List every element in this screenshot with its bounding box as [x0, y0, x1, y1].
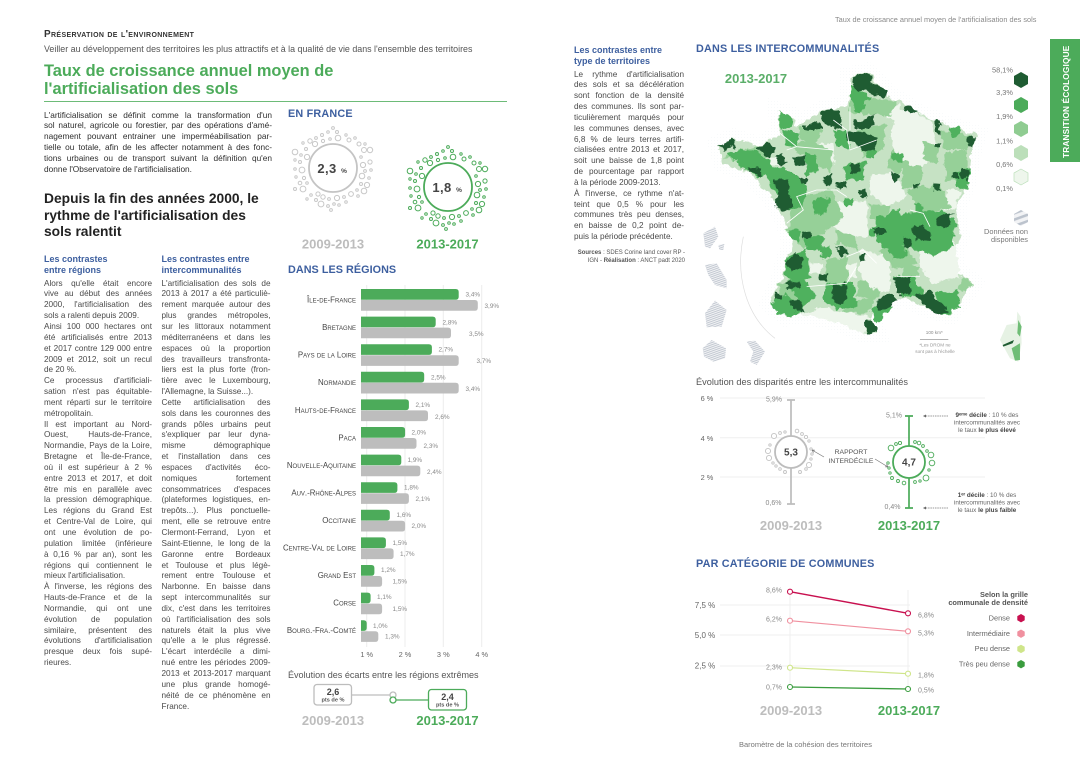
heading: type de territoires: Les contrastes entre [574, 45, 662, 55]
title: l'artificialisation des sols [44, 80, 238, 98]
text column: intercommunalités: Clermont-Ferrand, Lyon et [162, 528, 270, 537]
text column: type de territoires: communes très peu denses, [574, 210, 684, 219]
disparities subtitle: Évolution des disparités entre les intercommunalités [696, 376, 908, 386]
bar chart: regions: 3,5% [469, 331, 484, 338]
bar chart: regions: 1,6% [396, 512, 411, 519]
text column: intercommunalités: 2013 à 2017 a été particuliè- [162, 289, 270, 298]
text column: type de territoires: des sols et sa décélération [574, 80, 684, 89]
text column: régions: et 2017 contre 129 000 entre [44, 344, 152, 353]
heading: dans les intercommunalités: DANS LES INTERCOMMUNALITÉS [696, 42, 879, 54]
text column: régions: ont une évolution de po- [44, 528, 152, 537]
text column: régions: pulation limitée (inférieure [44, 539, 152, 548]
title: Taux de croissance annuel moyen de [44, 62, 333, 80]
regional gap chart: pts de % [436, 702, 459, 708]
text column: type de territoires: des communes. Ils sont par- [574, 102, 684, 111]
bar chart: regions: 2,1% [416, 402, 430, 409]
text column: régions: été artificialisés entre 2013 [44, 333, 152, 342]
line chart: commune categories [695, 588, 934, 694]
map legend: 0,1% [996, 184, 1013, 193]
text column: régions: Ce processus d'artificiali- [44, 376, 152, 385]
bar chart: regions: 1,1% [377, 594, 392, 601]
text column: intercommunalités: et l'installation dans ces [162, 452, 270, 461]
text column: type de territoires: sont fonction de la densité [574, 91, 684, 100]
bar chart: regions: Grand Est [318, 571, 356, 580]
bar chart: regions: 3,7% [476, 358, 491, 365]
disparities chart: intercommunalités avec [954, 420, 1020, 426]
text column: régions: vive au début des années [44, 289, 152, 298]
bar chart: regions: 2,0% [412, 523, 426, 530]
text column: intercommunalités: où l'artificialisation des sols [162, 615, 270, 624]
line chart: commune categories: 0,5% [918, 688, 934, 694]
text column: intercommunalités: Narbonne. En baisse dans [162, 582, 270, 591]
bar chart: regions: 1,0% [373, 623, 388, 630]
bar chart: regions: 1,3% [385, 634, 400, 640]
text column: type de territoires: À l'inverse, ce rythme n'at- [574, 189, 684, 198]
line chart: commune categories: 5,0 % [695, 631, 715, 640]
bar chart: regions: 1,5% [392, 606, 407, 613]
bar chart: regions: 1,5% [392, 578, 407, 586]
bar chart: regions: Normandie [318, 378, 356, 387]
France: 2013-2017 rate [407, 146, 488, 230]
text column: intercommunalités [162, 279, 270, 710]
text column: intercommunalités: ment, elle se retrouve entre [162, 517, 270, 526]
section label: Préservation de l'environnement [44, 29, 194, 40]
map period label: 2013-2017 [725, 71, 787, 86]
disparities chart: 0,4% [884, 504, 900, 511]
bar chart: regions: 4 % [475, 650, 488, 659]
bar chart: regions: 1,8% [404, 484, 419, 492]
intro text: tions urbaines ou de transport suivant la définition qu'en [44, 153, 272, 163]
bar chart: regions: 3,4% [466, 292, 480, 298]
map legend [984, 66, 1028, 244]
sources: IGN - Réalisation : ANCT padt 2020 [588, 258, 685, 264]
intro text: tielle ou totale, afin de les affecter notamment à des fonc- [44, 142, 272, 152]
text column: intercommunalités: (plateformes logistiques, en- [162, 495, 270, 504]
heading: type de territoires: type de territoires [574, 56, 650, 66]
text column: type de territoires [574, 70, 684, 241]
side tab label: TRANSITION ÉCOLOGIQUE [1061, 45, 1071, 158]
text column: type de territoires: puis la période précédente. [574, 232, 673, 241]
bar chart: regions: Paca [338, 434, 356, 442]
footer: Baromètre de la cohésion des territoires [739, 740, 872, 749]
map: France intercommunalities [703, 73, 1022, 365]
heading: par catégorie de communes: PAR CATÉGORIE DE COMMUNES [696, 558, 875, 570]
disparities chart: 5,3 [784, 448, 798, 458]
heading: en France: EN FRANCE [288, 108, 353, 120]
text column: régions: Ouest, Hauts-de-France, [44, 430, 152, 439]
sources: Sources : SDES Corine land cover RP - [578, 250, 685, 256]
disparities chart: 4,7 [902, 458, 916, 468]
bar chart: regions: Bourg.-Fra.-Comté [287, 626, 356, 635]
disparities chart: 5,9% [766, 396, 782, 404]
text column: régions: être mis en parallèle avec [44, 485, 152, 494]
text column: intercommunalités: France. [162, 702, 189, 710]
text column: régions: 2000, l'artificialisation des [44, 300, 152, 309]
disparities chart: 0,6% [766, 500, 781, 507]
text column: régions: À l'inverse, les régions des [44, 582, 152, 591]
subheading [44, 191, 259, 239]
text column: intercommunalités: Cette artificialisation des [162, 398, 270, 407]
text column: régions: mieux l'artificialisation. [44, 571, 125, 580]
text column: intercommunalités: s'expliquer par leur dyna- [162, 430, 270, 439]
line chart legend [948, 590, 1028, 668]
bar chart: regions: 1,2% [381, 567, 396, 574]
text column: intercommunalités: dix, c'est dans les territoires [162, 604, 270, 613]
text column: intercommunalités: grands pôles urbains peut [162, 420, 270, 429]
regional gap chart: 2,6 [327, 687, 339, 697]
text column: régions: similaire, présentent des [44, 626, 152, 635]
text column: intercommunalités: sols dans les couronnes des [162, 409, 270, 418]
map: France intercommunalities: sont pas à l'échelle [915, 349, 955, 354]
text column: intercommunalités: L'artificialisation des sols de [162, 279, 270, 288]
bar chart: regions: 2 % [399, 650, 412, 659]
map legend: Données non [984, 227, 1028, 236]
regional gap chart [314, 684, 466, 710]
regional gap chart: 2,4 [441, 692, 454, 702]
top-right running header: Taux de croissance annuel moyen de l'artificialisation des sols [835, 15, 1036, 24]
disparities chart: 4 % [701, 434, 714, 443]
text column: intercommunalités: espaces où la proportion [162, 344, 270, 353]
subheading: sols ralentit [44, 224, 121, 239]
text column: type de territoires: teint que 0,5 % pour les [574, 200, 684, 209]
bar chart: regions: Pays de la Loire [298, 350, 356, 360]
year label 2013-2017: 2013-2017 [416, 713, 479, 728]
sources [578, 250, 685, 264]
text column: régions: entre 2013 et 2017, et doit [44, 474, 152, 483]
text column: régions: la pression démographique. [44, 495, 152, 504]
text column: régions: Bretagne et Île-de-France, [44, 452, 152, 461]
text column: régions [44, 279, 152, 667]
text column: intercommunalités: sur les littoraux notamment [162, 322, 270, 331]
bar chart: regions: Bretagne [322, 323, 356, 332]
map legend: 3,3% [996, 88, 1013, 97]
bar chart: regions: Occitanie [322, 516, 356, 525]
bar chart: regions: 2,0% [412, 430, 426, 436]
text column: régions: 2009 et 2012, soit un recul [44, 354, 152, 364]
bar chart: regions: Île-de-France [306, 296, 356, 304]
year label 2013-2017: 2013-2017 [878, 703, 940, 718]
France: 2009-2013 rate: 2,3 [317, 161, 337, 176]
line chart: commune categories: 1,8% [918, 672, 934, 680]
text column: régions: Alors qu'elle était encore [44, 279, 152, 288]
subheading: Depuis la fin des années 2000, le [44, 191, 259, 206]
bar chart: regions: 1,5% [392, 540, 407, 547]
map legend: disponibles [991, 235, 1028, 244]
map legend: 1,9% [996, 112, 1013, 121]
line chart: commune categories: 7,5 % [695, 601, 715, 610]
heading: contrastes entre intercommunalités: intercommunalités [162, 264, 242, 274]
bar chart: regions: 3,4% [466, 386, 480, 393]
text column: intercommunalités: néité de ce phénomène en [162, 691, 270, 700]
line chart: commune categories: 0,7% [766, 684, 782, 692]
text column: régions: ment réparti sur le territoire [44, 398, 152, 407]
text column: régions: Normandie, Pays de la Loire, [44, 441, 152, 450]
text column: régions: presque deux fois supé- [44, 647, 152, 656]
disparities chart: le taux le plus faible [958, 507, 1017, 514]
regional gap chart: pts de % [321, 698, 345, 704]
heading: contrastes entre intercommunalités: Les contrastes entre [162, 254, 250, 264]
bar chart: regions: 1,9% [408, 457, 422, 464]
heading: contrastes entre régions: entre régions [44, 264, 101, 274]
text column: régions: Les régions du Grand Est [44, 506, 152, 515]
text column: intercommunalités: tière avec le Luxembourg, [162, 376, 270, 385]
text column: intercommunalités: consommatrices d'espaces [162, 485, 270, 494]
bar chart: regions: 2,1% [416, 496, 430, 503]
disparities chart: 5,1% [886, 412, 902, 420]
bar chart: regions: Centre-Val de Loire [283, 544, 356, 552]
disparities chart: intercommunalités avec [954, 500, 1020, 506]
regional gaps subtitle: Évolution des écarts entre les régions extrêmes [288, 670, 479, 680]
text column: intercommunalités: espaces d'activités éco- [162, 463, 270, 472]
bar chart: regions: 3 % [437, 650, 450, 659]
France: 2009-2013 rate [292, 127, 373, 211]
text column: régions: sols a ralenti depuis 2009. [44, 311, 139, 320]
France: 2009-2013 rate: % [341, 168, 347, 175]
map: France intercommunalities: *Les DROM ne [919, 343, 951, 348]
text column: régions: et Centre-Val de Loire, qui [44, 517, 152, 526]
heading: contrastes entre intercommunalités [162, 254, 250, 274]
France: 2013-2017 rate: % [456, 187, 462, 194]
text column: type de territoires: de pourcentage par rapport [574, 167, 684, 176]
text column: intercommunalités: sept intercommunalités sur [162, 593, 270, 602]
text column: type de territoires: Le rythme d'artificialisation [574, 70, 684, 78]
text column: intercommunalités: et Toulouse et plus légè- [162, 561, 270, 570]
year label 2013-2017: 2013-2017 [416, 236, 479, 252]
text column: intercommunalités: nué entre les périodes 2009- [162, 658, 270, 667]
text column: intercommunalités: Saint-Etienne, le long de la [162, 539, 270, 548]
text column: régions: évolution de population [44, 615, 152, 624]
text column: intercommunalités: nomiques fortement [162, 474, 270, 483]
text column: intercommunalités: L'écart interdécile a dimi- [162, 647, 270, 656]
text column: type de territoires: 6,8 % de leurs terres artifi- [574, 135, 684, 144]
text column: type de territoires: les communes denses, avec [574, 124, 684, 133]
map legend: 58,1% [992, 66, 1013, 74]
bar chart: regions: 2,6% [435, 414, 450, 421]
disparities chart: le taux le plus élevé [958, 427, 1016, 434]
intro text: sol naturel, agricole ou forestier, par des opérations d'amé- [44, 120, 272, 130]
intro text: nagement pouvant entrainer une imperméabilisation par- [44, 131, 272, 141]
bar chart: regions: 2,8% [442, 320, 457, 326]
text column: intercommunalités: une plus grande homogé- [162, 680, 270, 689]
line chart: commune categories: 5,3% [918, 630, 934, 638]
line chart legend: Dense [989, 614, 1010, 622]
year label 2013-2017: 2013-2017 [878, 518, 940, 533]
year label 2009-2013: 2009-2013 [302, 236, 364, 252]
heading: type de territoires [574, 45, 662, 66]
side tab [1050, 39, 1080, 162]
bar chart: regions: 2,3% [424, 443, 438, 450]
text column: intercommunalités: misme démographique [162, 441, 270, 450]
year label 2009-2013: 2009-2013 [302, 713, 364, 728]
bar chart: regions: 2,4% [427, 469, 442, 476]
text column: intercommunalités: l'Allemagne, la Suisse...). [162, 387, 253, 396]
map legend: 1,1% [996, 136, 1013, 146]
text column: intercommunalités: Garonne entre Bordeaux [162, 550, 270, 559]
text column: régions: Il est important au Nord- [44, 420, 152, 429]
text column: type de territoires: ticulièrement marqués pour [574, 113, 684, 122]
text column: intercommunalités: trepôts...). Plus ponctuelle- [162, 506, 270, 515]
disparities chart: 6 % [701, 394, 714, 403]
text column: type de territoires: en baisse de 0,2 point de- [574, 221, 684, 230]
text column: intercommunalités: 2013 et 2013-2017 marquant [162, 669, 270, 678]
text column: intercommunalités: rement marquée autour des [162, 300, 270, 309]
disparities chart: 1ᵉʳ décile : 10 % des [958, 492, 1016, 499]
disparities chart: RAPPORT [835, 449, 867, 456]
title rule [44, 101, 507, 102]
text column: intercommunalités: rement entre Toulouse et [162, 571, 270, 580]
disparities chart: INTERDÉCILE [829, 456, 874, 465]
text column: régions: Hauts-de-France et de la [44, 593, 152, 602]
intro text [44, 110, 272, 174]
section subtitle: Veiller au développement des territoires les plus attractifs et à la qualité de vie dans l'ensemble des territoires [44, 44, 472, 54]
year label 2009-2013: 2009-2013 [760, 703, 822, 718]
disparities chart: 2 % [701, 473, 714, 482]
text column: type de territoires: cialisées entre 2013 et 2017, [574, 145, 684, 154]
text column: intercommunalités: plus grandes métropoles, [162, 311, 270, 320]
intro text: donne l'Observatoire de l'artificialisation. [44, 164, 192, 174]
text column: régions: de 20 %. [44, 365, 76, 374]
bar chart: regions: Auv.-Rhône-Alpes [291, 488, 356, 498]
bar chart: regions: 3,9% [484, 303, 499, 310]
intro text: L'artificialisation se définit comme la transformation d'un [44, 110, 272, 120]
text column: intercommunalités: des travailleurs transfronta- [162, 354, 270, 364]
bar chart: regions: 1 % [360, 650, 373, 659]
map legend: 0,6% [996, 160, 1013, 169]
text column: régions: évolutions d'artificialisation [44, 636, 152, 645]
subheading: rythme de l'artificialisation des [44, 208, 246, 223]
text column: intercommunalités: qu'elle a le plus régressé. [162, 636, 270, 645]
text column: intercommunalités: naturels était la plus vive [162, 626, 270, 635]
heading: dans les régions: DANS LES RÉGIONS [288, 264, 396, 276]
year label 2009-2013: 2009-2013 [760, 518, 822, 533]
text column: régions: Normandie, qui ont une [44, 604, 152, 613]
bar chart: regions: 2,5% [431, 374, 446, 382]
heading: contrastes entre régions [44, 254, 108, 275]
text column: intercommunalités: liers est la plus forte (fron- [162, 365, 270, 374]
line chart legend: Selon la grille [980, 590, 1028, 599]
text column: régions: sation n'est pas équitable- [44, 387, 152, 396]
disparities chart: 9ᵉᵐᵉ décile : 10 % des [956, 412, 1018, 419]
bar chart: regions: 2,7% [438, 346, 453, 354]
bar chart: regions: Corse [333, 598, 356, 608]
line chart legend: communale de densité [948, 598, 1028, 607]
line chart legend: Très peu dense [959, 660, 1010, 668]
France: 2013-2017 rate: 1,8 [432, 180, 452, 195]
bar chart: regions [283, 285, 499, 659]
text column: régions: où il est supérieur à 2 % [44, 463, 152, 472]
line chart: commune categories: 2,3% [766, 664, 782, 672]
text column: régions: rieures. [44, 658, 71, 667]
text column: intercommunalités: méditerranéens et dans les [162, 333, 270, 342]
text column: régions: régions qui contiennent le [44, 561, 152, 570]
text column: type de territoires: à la période 2009-2013. [574, 178, 660, 187]
title [44, 62, 333, 98]
bar chart: regions: Hauts-de-France [295, 406, 356, 415]
line chart legend: Peu dense [975, 644, 1010, 653]
map: France intercommunalities: 100 km* [926, 330, 943, 335]
heading: contrastes entre régions: Les contrastes [44, 254, 108, 264]
bar chart: regions: Nouvelle-Aquitaine [287, 461, 356, 470]
text column: régions: Ainsi 100 000 hectares ont [44, 322, 152, 331]
text column: régions: à 0,16 % par an), sont les [44, 550, 152, 559]
line chart: commune categories: 6,8% [918, 612, 934, 620]
line chart: commune categories: 2,5 % [695, 662, 715, 670]
text column: type de territoires: soit une baisse de 1,8 point [574, 156, 684, 165]
line chart: commune categories: 6,2% [766, 616, 782, 624]
line chart: commune categories: 8,6% [766, 588, 782, 594]
bar chart: regions: 1,7% [400, 551, 415, 558]
text column: régions: métropolitain. [44, 409, 93, 418]
disparities chart [701, 394, 1020, 514]
line chart legend: Intermédiaire [967, 629, 1010, 638]
